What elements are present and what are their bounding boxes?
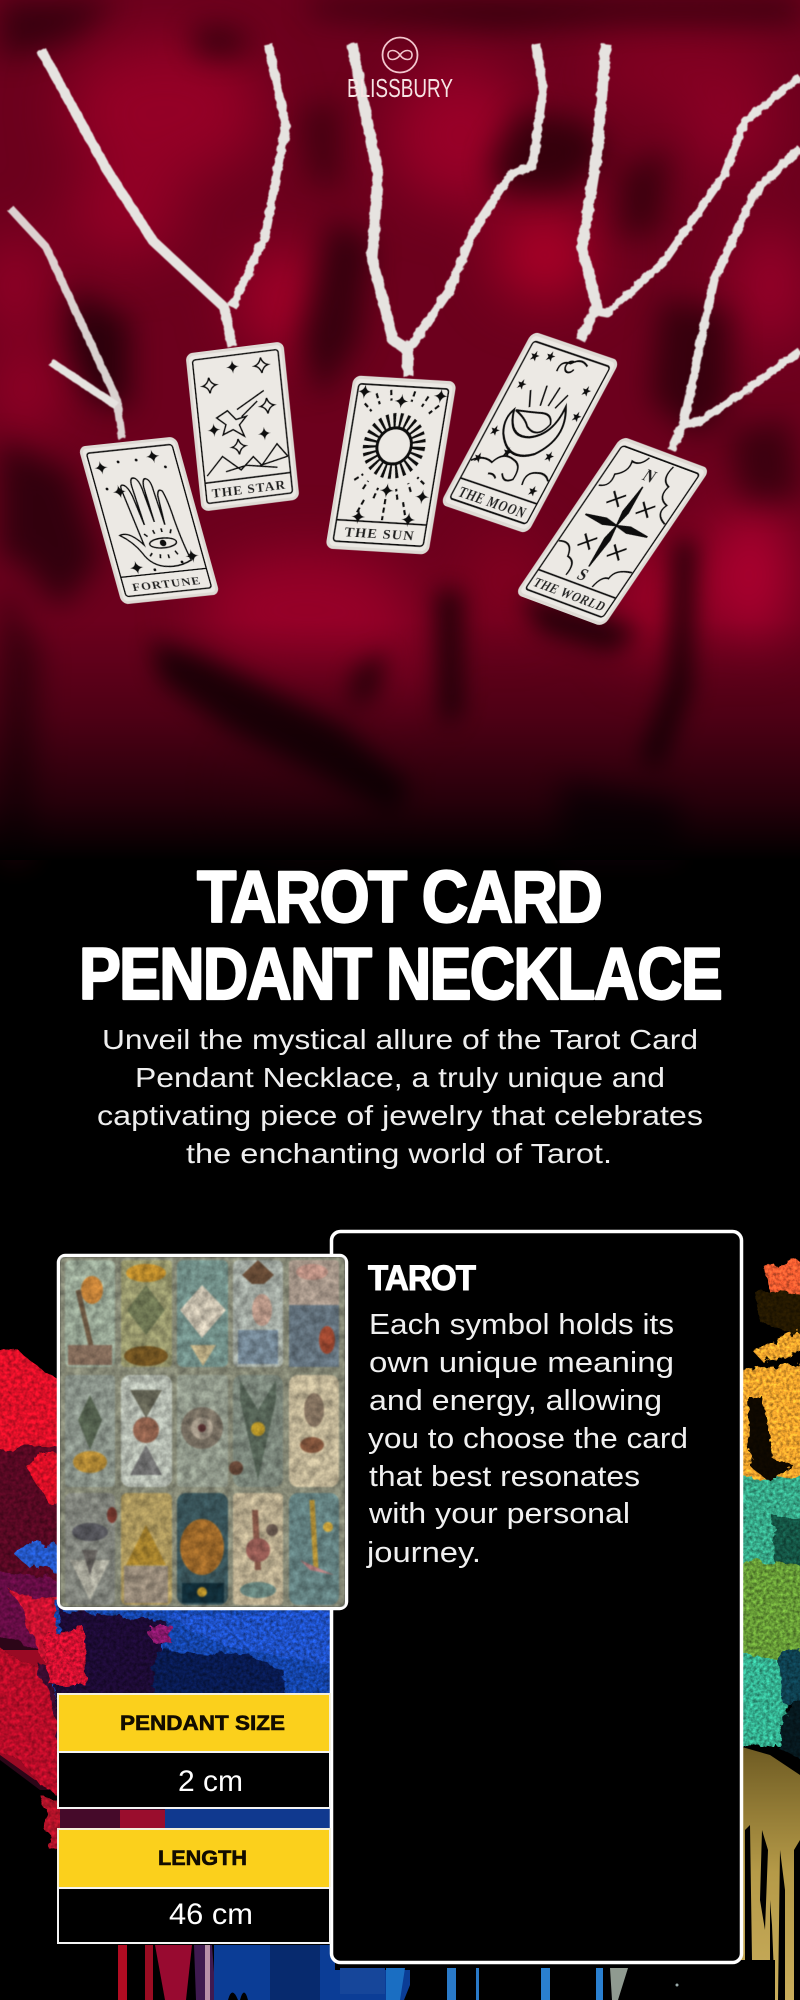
pendant: The World bbox=[517, 438, 708, 625]
hero photo: necklaces on red velvet bbox=[0, 0, 800, 860]
right paint splash bbox=[735, 1260, 800, 2000]
pendant: The World: S bbox=[573, 565, 593, 585]
logo: Blissbury bbox=[347, 38, 453, 103]
left paint splash bbox=[0, 1345, 340, 1855]
title bbox=[79, 857, 721, 1015]
panel body text: and energy, allowing bbox=[369, 1385, 662, 1417]
panel body text: own unique meaning bbox=[369, 1347, 674, 1379]
panel body text: you to choose the card bbox=[368, 1423, 688, 1455]
panel body text: with your personal bbox=[368, 1498, 630, 1530]
spec table: pendant size: 2 cm bbox=[178, 1765, 243, 1798]
pendant: The Star: THE STAR bbox=[211, 478, 287, 501]
pendant: The Star bbox=[187, 343, 298, 510]
row 1 of tarot cards bbox=[65, 1260, 339, 1367]
pendant: The World: THE WORLD bbox=[530, 574, 610, 614]
pendant: The World: N bbox=[639, 465, 661, 487]
spec table: length bbox=[58, 1829, 330, 1943]
tarot cards image bbox=[58, 1256, 346, 1608]
spec table: pendant size: PENDANT SIZE bbox=[120, 1712, 285, 1735]
necklace chains bbox=[10, 44, 800, 450]
fade to black bbox=[0, 620, 800, 860]
panel body text: journey. bbox=[366, 1537, 481, 1569]
logo: Blissbury: BLISSBURY bbox=[347, 73, 453, 103]
intro text bbox=[97, 1024, 703, 1169]
pendant: Fortune: FORTUNE bbox=[131, 574, 203, 594]
pendant: The Sun bbox=[327, 377, 455, 553]
text panel: Tarot bbox=[332, 1232, 742, 1962]
spec table: pendant size bbox=[58, 1694, 330, 1808]
pendant: The Moon bbox=[442, 333, 618, 532]
panel body text: that best resonates bbox=[369, 1461, 640, 1493]
intro text: Unveil the mystical allure of the Tarot Card bbox=[102, 1024, 698, 1055]
pendant: Fortune bbox=[80, 438, 218, 603]
pendant: The Moon: THE MOON bbox=[455, 484, 530, 521]
panel body text: Each symbol holds its bbox=[369, 1309, 674, 1341]
spec table: length: 46 cm bbox=[169, 1898, 253, 1931]
bottom paint drips bbox=[118, 1945, 678, 2000]
velvet background bbox=[0, 0, 800, 860]
title: TAROT CARD bbox=[197, 857, 601, 938]
intro text: Pendant Necklace, a truly unique and bbox=[135, 1062, 665, 1093]
pendant: The Sun: THE SUN bbox=[343, 524, 416, 543]
intro text: the enchanting world of Tarot. bbox=[186, 1138, 612, 1169]
row 2 of tarot cards bbox=[65, 1375, 339, 1487]
spec table: length: LENGTH bbox=[158, 1847, 247, 1870]
panel heading: TAROT bbox=[368, 1259, 476, 1298]
panel body text bbox=[366, 1309, 688, 1569]
row 3 of tarot cards bbox=[65, 1493, 339, 1605]
intro text: captivating piece of jewelry that celebrates bbox=[97, 1100, 703, 1131]
